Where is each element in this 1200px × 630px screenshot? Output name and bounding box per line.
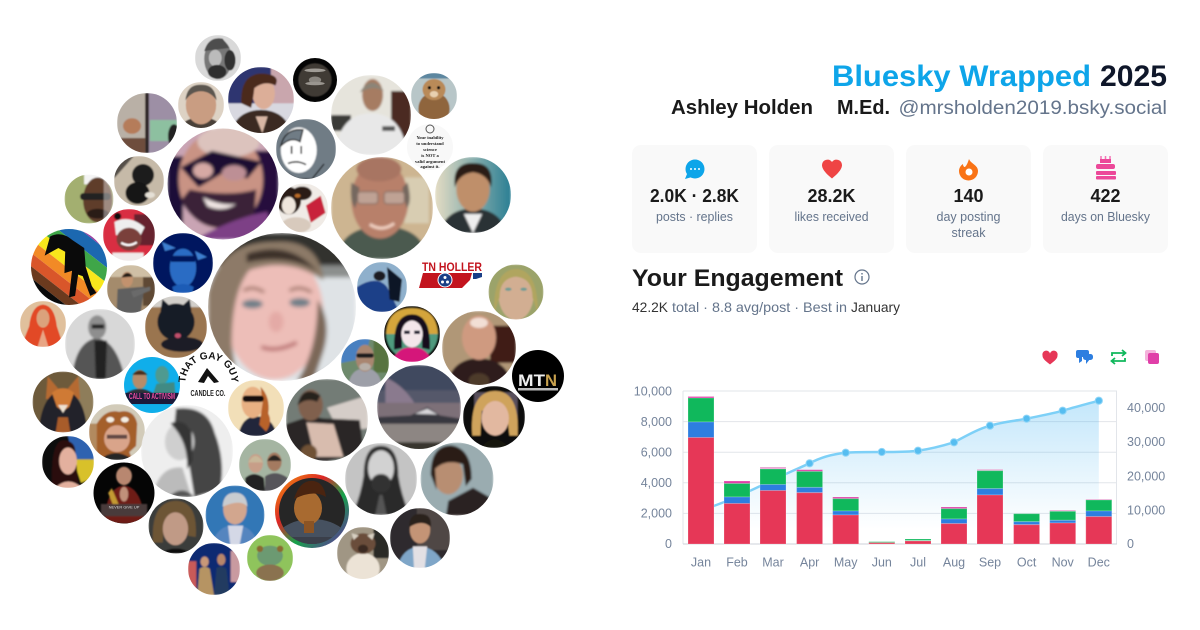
stacked bars [688, 396, 1112, 544]
engagement stats line: 42.2K [632, 299, 669, 315]
right axis labels: 0 [1127, 537, 1134, 551]
card: days on Bluesky: days on Bluesky [1061, 210, 1151, 224]
avatar: man in blue suit [206, 486, 264, 544]
month labels: May [834, 556, 858, 570]
card: posts and replies: 2.0K · 2.8K [650, 186, 739, 206]
avatar: science quote text: is NOT a [421, 153, 439, 158]
month labels: Jul [910, 556, 926, 570]
avatar: hooded fox [32, 372, 94, 432]
card: likes received [769, 145, 894, 253]
avatar: milky way over mountain [377, 365, 461, 451]
avatar: blue duotone portrait [153, 233, 213, 293]
right axis labels: 30,000 [1127, 435, 1165, 449]
avatar: cartoon line drawing [276, 119, 336, 179]
avatar: rainbow ring silhouette [275, 474, 349, 548]
icon: replies [1076, 350, 1093, 364]
right axis labels: 20,000 [1127, 470, 1165, 484]
avatar: Himalayan cat [337, 527, 389, 584]
avatar: vintage portrait on teal [435, 157, 511, 233]
avatar: woman with curly hair [148, 498, 204, 554]
card: posts and replies [632, 145, 757, 253]
avatar: man with dark hair against sky [420, 442, 494, 516]
avatar: man with grey hair [178, 82, 224, 128]
engagement stats line [632, 299, 900, 315]
profile name: Ashley Holden [671, 97, 813, 119]
avatar: squirrel [411, 73, 457, 119]
logo: That Gay Guy Candle Co: THAT GAY GUY [178, 352, 238, 382]
avatar: science quote text: science [423, 147, 437, 152]
avatar: science quote text: valid argument [415, 159, 445, 164]
profile name [671, 97, 890, 119]
avatar: man in sunglasses with foliage [64, 174, 114, 224]
avatar: red hooded figure [20, 301, 66, 347]
avatar: man in grey sweater [107, 265, 155, 313]
avatar: doll portrait with rainbow [384, 306, 440, 362]
avatar: photo collage [117, 93, 180, 153]
panel: avatar bubble cloud [20, 35, 564, 595]
icon: quotes [1145, 350, 1159, 364]
month labels: Mar [762, 556, 784, 570]
left axis labels: 8,000 [641, 415, 672, 429]
logo: That Gay Guy Candle Co [178, 352, 238, 398]
logo: TN Holler [419, 262, 483, 288]
icon: heart [1042, 351, 1058, 364]
avatar: black poodle [114, 156, 164, 206]
logo: TN Holler: TN HOLLER [422, 262, 483, 274]
avatar: science quote text: to understand [416, 141, 444, 146]
month labels: Oct [1017, 556, 1037, 570]
right axis labels: 40,000 [1127, 401, 1165, 415]
month labels: Aug [943, 556, 965, 570]
avatar: red cartoon character [103, 209, 155, 261]
avatar: call to activism: CALL TO ACTIVISM [129, 392, 175, 401]
avatar: greyscale woman long hair [141, 405, 233, 497]
month labels: Jan [691, 556, 711, 570]
chart: monthly engagement stacked bars with cumulative line [634, 384, 1165, 570]
card: likes received: likes received [794, 210, 869, 224]
heading: Your Engagement: Your Engagement [632, 265, 843, 292]
avatar: dark dog on wood floor [145, 296, 207, 358]
avatar: blonde woman on black [463, 386, 525, 448]
title: 2025 [1100, 60, 1167, 93]
avatar: woman in sunglasses [228, 380, 284, 436]
month labels: Apr [800, 556, 819, 570]
avatar: man in red panda hood [89, 404, 145, 460]
avatar: couple with flags [188, 543, 240, 595]
panel: wrapped header [671, 60, 1167, 119]
card: days on Bluesky: 422 [1090, 186, 1120, 206]
avatar: MTN logo: MT [518, 371, 546, 390]
card: posts and replies: posts · replies [656, 210, 733, 224]
avatar: man in white shirt [331, 75, 411, 155]
avatar: green frog [247, 535, 293, 581]
right axis labels [1127, 401, 1165, 551]
avatar: spaniel with scarf [277, 184, 328, 233]
avatar: older man with glasses [331, 157, 433, 259]
cumulative line [701, 401, 1099, 511]
avatar: MTN logo: N [545, 371, 557, 390]
avatar: man in sunglasses outdoors [341, 339, 389, 387]
left axis labels [634, 384, 672, 551]
avatar: science quote text: against it. [420, 164, 440, 169]
icon: info [855, 270, 869, 284]
card: likes received: 28.2K [808, 186, 856, 206]
card: day posting streak: day posting [936, 210, 1001, 224]
avatar: MTN logo [512, 350, 564, 402]
avatar: theatre badge black [293, 58, 337, 102]
title: Bluesky Wrapped [832, 60, 1091, 93]
month labels: Feb [726, 556, 748, 570]
icon: reposts [1112, 350, 1126, 364]
avatar: bald man with glasses large [168, 126, 278, 240]
avatar: woman large centre portrait [208, 233, 356, 381]
left axis labels: 0 [665, 537, 672, 551]
grid lines [683, 391, 1117, 544]
profile name: M.Ed. [837, 97, 890, 119]
avatar: blue gown painting [357, 262, 407, 312]
card: day posting streak [906, 145, 1031, 253]
card: day posting streak: 140 [954, 186, 984, 206]
avatar: speaker greyscale [65, 309, 135, 379]
left axis labels: 2,000 [641, 506, 672, 520]
month labels: Dec [1088, 556, 1110, 570]
panel: engagement summary [632, 265, 900, 315]
month labels: Nov [1052, 556, 1075, 570]
avatar: man in blue blazer [390, 508, 450, 568]
card: day posting streak: streak [952, 226, 986, 240]
avatar: Dalai Lama quote [94, 462, 154, 524]
left axis labels: 10,000 [634, 384, 672, 398]
left axis labels: 6,000 [641, 446, 672, 460]
avatar: call to activism [124, 357, 180, 413]
avatar: man lying with cat [286, 379, 368, 461]
logo: That Gay Guy Candle Co: CANDLE CO. [190, 388, 226, 398]
month labels [691, 556, 1110, 570]
engagement stats line: January [851, 299, 900, 315]
avatar: blonde woman on green [488, 264, 544, 320]
month labels: Sep [979, 556, 1001, 570]
avatar: bald man in dark shirt [442, 311, 516, 388]
avatar: science quote text [407, 124, 453, 170]
avatar: pride stripes silhouette [31, 229, 107, 305]
line points [806, 397, 1102, 467]
card: days on Bluesky [1043, 145, 1168, 253]
engagement stats line: total · 8.8 avg/post · Best in [672, 299, 847, 315]
avatar: woman with Ukrainian flag [42, 436, 94, 488]
month labels: Jun [872, 556, 892, 570]
avatar: couple selfie [239, 439, 291, 491]
panel: stat cards [632, 145, 1168, 253]
avatar: bearded man greyscale [345, 443, 417, 515]
avatar: science quote text: Your inability [416, 135, 444, 140]
right axis labels: 10,000 [1127, 504, 1165, 518]
chart legend icons [1042, 350, 1159, 364]
left axis labels: 4,000 [641, 476, 672, 490]
avatar: woman with US flag [228, 67, 294, 133]
avatar: Dalai Lama quote: NEVER GIVE UP [109, 504, 140, 509]
cumulative area [701, 401, 1099, 544]
profile handle: @mrsholden2019.bsky.social [898, 98, 1167, 119]
avatar: bald man greyscale [195, 35, 241, 81]
